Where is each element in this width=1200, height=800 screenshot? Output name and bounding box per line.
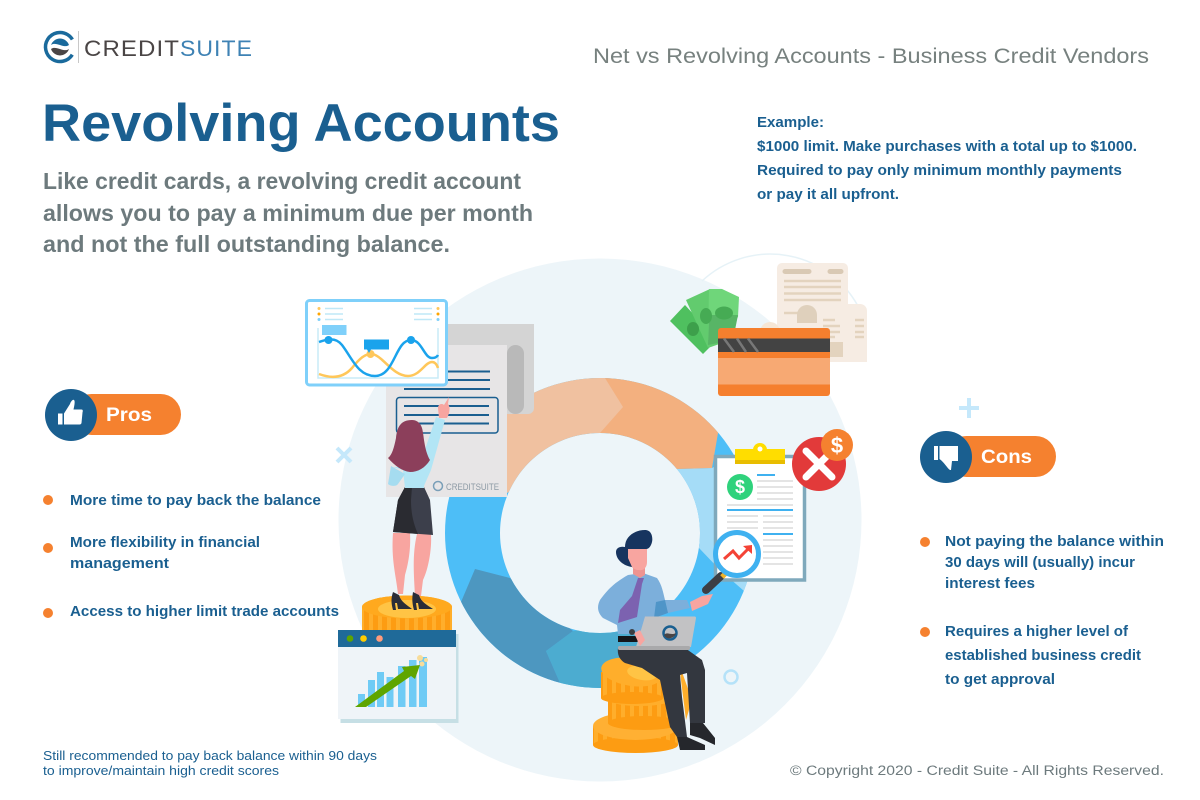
pros list: More flexibility in financial	[70, 535, 260, 551]
illustration: coin stacks	[593, 654, 680, 753]
footnote: to improve/maintain high credit scores	[43, 764, 279, 778]
logo: CREDIT	[84, 36, 180, 61]
donut ring	[445, 378, 748, 688]
cons list: Not paying the balance within	[945, 534, 1164, 550]
icon: thumbs down	[934, 446, 958, 470]
pros badge: Pros	[106, 404, 152, 426]
example text: Required to pay only minimum monthly payments	[757, 163, 1122, 179]
cons list: interest fees	[945, 576, 1035, 592]
example text: Example:	[757, 115, 824, 131]
cons list: 30 days will (usually) incur	[945, 555, 1135, 571]
footnote: Still recommended to pay back balance within 90 days	[43, 749, 377, 763]
illustration: clipboard: $	[735, 477, 745, 497]
illustration: document	[386, 324, 534, 497]
illustration: line chart card	[306, 300, 446, 385]
illustration: credit card	[718, 328, 830, 396]
background circle	[338, 258, 862, 782]
illustration: clipboard	[716, 443, 804, 580]
illustration: woman standing on coin	[362, 397, 452, 632]
icon: plus decoration	[959, 398, 979, 418]
icon: red x with dollar badge	[792, 429, 853, 491]
example text: $1000 limit. Make purchases with a total up to $1000.	[757, 139, 1137, 155]
header subtitle: Net vs Revolving Accounts - Business Credit Vendors	[593, 45, 1149, 68]
cons badge: Cons	[981, 446, 1032, 468]
intro text: and not the full outstanding balance.	[43, 231, 450, 257]
example text	[757, 115, 1137, 203]
pros list: Access to higher limit trade accounts	[70, 604, 339, 620]
title: Revolving Accounts	[42, 94, 560, 153]
icon: x mark decoration	[337, 448, 351, 462]
pros list	[43, 493, 339, 620]
illustration: man sitting with laptop	[598, 530, 715, 750]
intro text: allows you to pay a minimum due per month	[43, 200, 533, 226]
icon: red x with dollar badge: $	[831, 433, 843, 458]
cons badge	[920, 431, 1056, 483]
cons list: Requires a higher level of	[945, 624, 1128, 640]
intro text	[43, 168, 533, 257]
illustration: document: CREDITSUITE	[446, 482, 499, 492]
footnote	[43, 749, 377, 778]
icon: thumbs up	[58, 400, 83, 424]
pros badge	[45, 389, 181, 441]
decorative arc	[702, 254, 860, 310]
icon: ring decoration	[724, 670, 738, 684]
pros list: management	[70, 556, 169, 572]
icon: magnifier with trend arrow	[706, 532, 758, 590]
illustration: browser bar chart	[338, 630, 458, 723]
logo: SUITE	[180, 36, 253, 61]
cons list: to get approval	[945, 672, 1055, 688]
illustration: money	[670, 289, 739, 354]
logo	[40, 27, 253, 67]
copyright: © Copyright 2020 - Credit Suite - All Rights Reserved.	[790, 763, 1164, 778]
cons list	[920, 534, 1164, 688]
pros list: More time to pay back the balance	[70, 493, 321, 509]
illustration: receipts	[760, 263, 867, 362]
intro text: Like credit cards, a revolving credit account	[43, 168, 521, 194]
example text: or pay it all upfront.	[757, 187, 899, 203]
cons list: established business credit	[945, 648, 1141, 664]
